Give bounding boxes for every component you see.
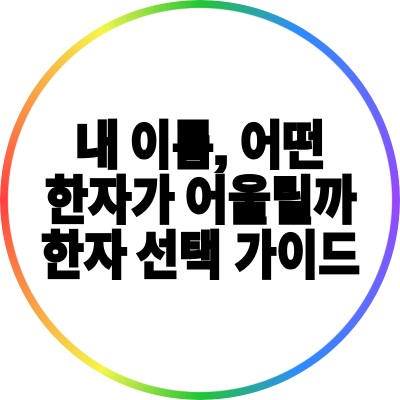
title line 1: , (212, 118, 230, 176)
title line 1: 어떤 (240, 118, 325, 176)
title line 3: 한자 (41, 228, 127, 286)
title line 2 (45, 173, 357, 231)
title line 1: 이름 (130, 118, 214, 176)
title line 2: 어울릴까 (185, 173, 357, 231)
title line 2: 한자가 (45, 173, 175, 231)
title line 3: 가이드 (235, 228, 360, 286)
title line 1 (75, 118, 325, 176)
title line 3 (41, 228, 360, 286)
title line 3: 선택 (136, 228, 222, 286)
title line 1: 내 (75, 118, 120, 176)
